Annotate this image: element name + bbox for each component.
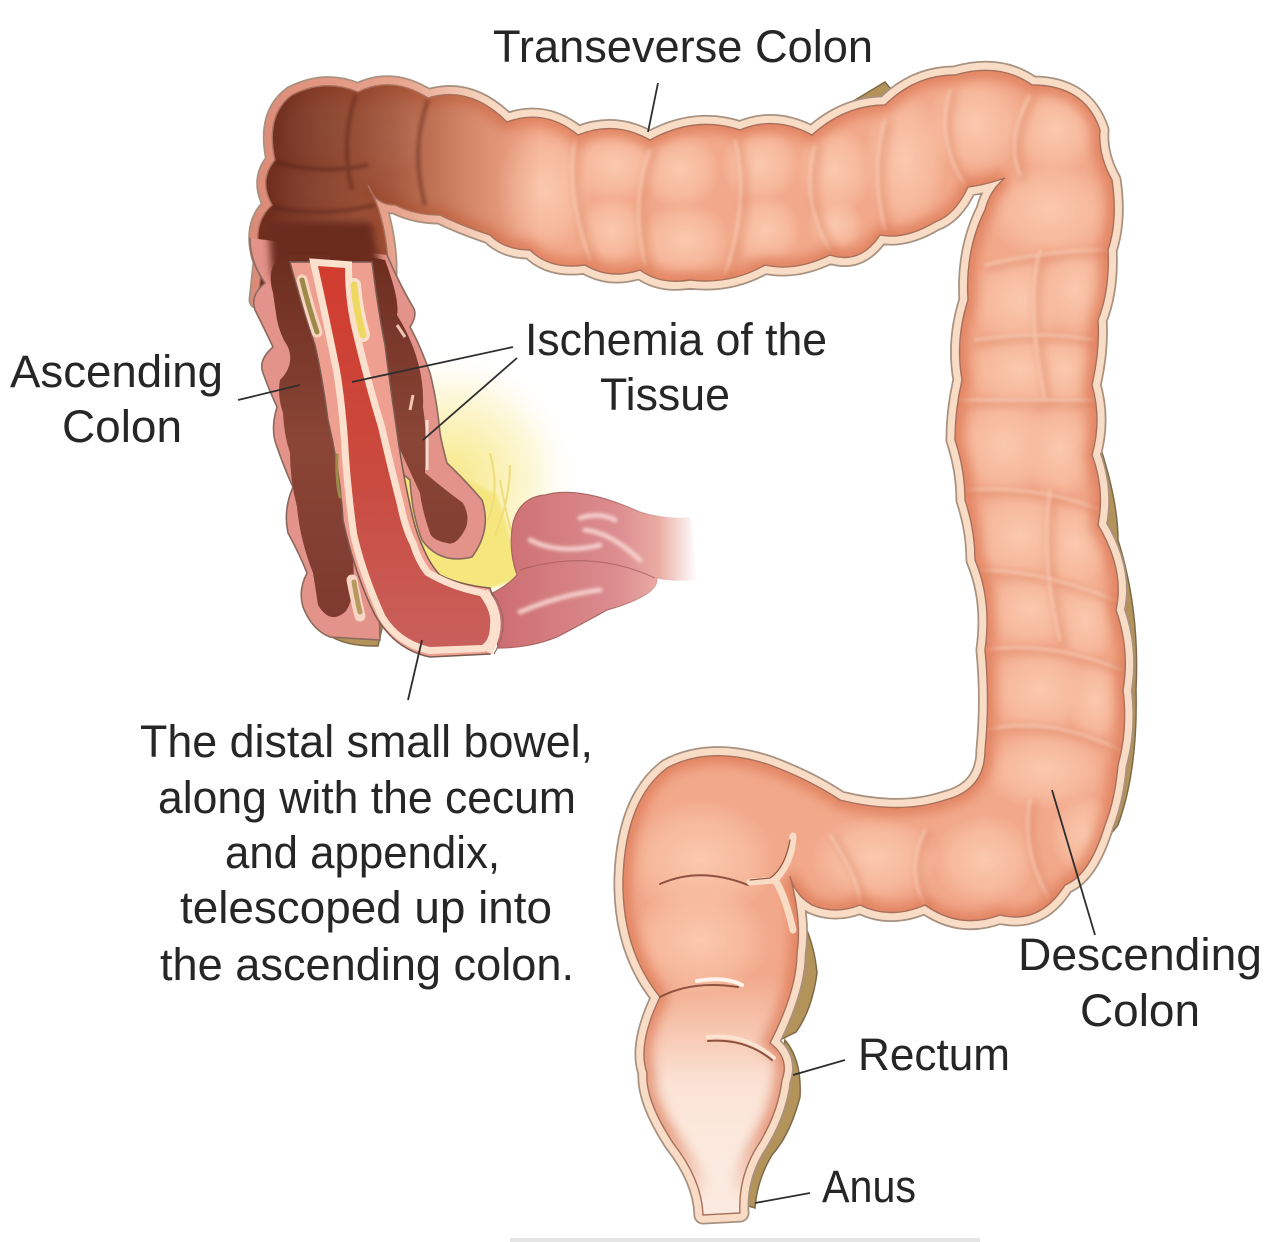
- olive serosa bands behind the colon: [318, 82, 1137, 1208]
- text block: distal small bowel description: The distal small bowel,: [140, 716, 593, 767]
- tube end rim: [484, 592, 496, 652]
- label: transverse colon: Transeverse Colon: [493, 21, 873, 72]
- label: ascending colon: Colon: [62, 401, 182, 452]
- text block: distal small bowel description: telescoped up into: [180, 882, 552, 933]
- fat pockets: [302, 280, 363, 616]
- label: ascending colon: [10, 346, 223, 452]
- ischemia glow: [315, 320, 585, 620]
- text block: distal small bowel description: along with the cecum: [158, 772, 576, 823]
- label: ischemia of the tissue: [525, 314, 827, 420]
- large intestine body: [240, 60, 1126, 1225]
- ascending colon wall, cut open: [250, 222, 485, 640]
- label: rectum: Rectum: [858, 1029, 1010, 1080]
- cream lining: [318, 266, 490, 647]
- small bowel, outside the colon: [488, 492, 697, 648]
- label: descending colon: [1018, 929, 1262, 1036]
- join to upper lumen: [268, 222, 382, 278]
- label: descending colon: Colon: [1080, 985, 1200, 1036]
- text block: distal small bowel description: [140, 716, 593, 990]
- fold shadows: [576, 93, 1126, 908]
- yellow mesentery: [398, 453, 520, 594]
- leader lines: [238, 83, 1095, 1203]
- label: anus: Anus: [822, 1161, 916, 1212]
- text block: distal small bowel description: and appendix,: [225, 827, 500, 878]
- fold highlights: [572, 90, 1122, 905]
- label: descending colon: Descending: [1018, 929, 1262, 980]
- anal canal pale end: [670, 1137, 762, 1214]
- cropped caption remnant: [510, 1238, 980, 1242]
- haustra sacs: [383, 84, 1116, 986]
- label: ischemia of the tissue: Ischemia of the: [525, 314, 827, 365]
- text block: distal small bowel description: the ascending colon.: [160, 939, 574, 990]
- label: ischemia of the tissue: Tissue: [600, 369, 730, 420]
- right lumen: [360, 255, 468, 544]
- left lumen: [271, 255, 354, 617]
- dark lobe creases: [272, 95, 428, 212]
- rectum pale lower portion: [644, 987, 786, 1193]
- dark caecal end: [258, 86, 526, 286]
- edge shading: [352, 71, 1125, 1193]
- label: ascending colon: Ascending: [10, 346, 223, 397]
- rectal folds: [660, 836, 793, 1060]
- telescoped small bowel, cut section: [290, 262, 503, 657]
